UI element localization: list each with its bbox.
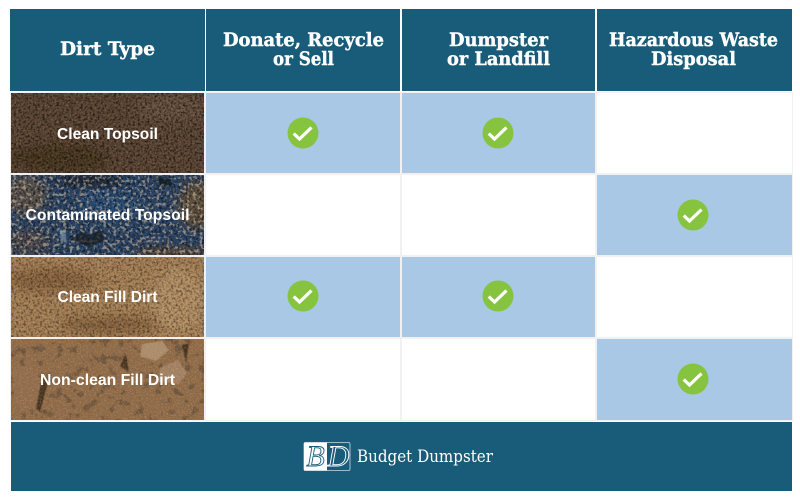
row 4: Dumpster cell empty: [402, 339, 595, 420]
row 4: Hazardous cell with check: [597, 339, 792, 420]
row 2: Dumpster cell empty: [402, 175, 595, 255]
row 4: Non-clean Fill Dirt image and label: Non-clean Fill Dirt: [40, 372, 175, 389]
logo: wordmark: Budget Dumpster: [357, 447, 493, 466]
row 3: Dumpster cell with check: [402, 257, 595, 337]
header: Dumpster or Landfill: or Landfill: [447, 49, 550, 70]
logo: BD mark: D: [327, 440, 350, 473]
row 1: Clean Topsoil image and label: Clean Topsoil: [57, 126, 158, 143]
row 1: Hazardous cell empty: [597, 93, 792, 173]
header: Dirt Type: Dirt Type: [60, 39, 155, 60]
row 4: Donate cell empty: [206, 339, 400, 420]
header: Dumpster or Landfill: Dumpster: [449, 30, 548, 51]
footer banner: [11, 422, 792, 491]
logo: BD mark: [304, 440, 350, 473]
header: Donate, Recycle or Sell: [206, 9, 400, 91]
row 1: Donate cell with check: [206, 93, 400, 173]
header: Hazardous Waste Disposal: Hazardous Waste: [609, 30, 778, 51]
row 4: Non-clean Fill Dirt image and label: [11, 339, 204, 420]
row 3: Clean Fill Dirt image and label: [5, 257, 204, 337]
row 3: Donate cell with check: [206, 257, 400, 337]
row 2: Hazardous cell with check: [597, 175, 792, 255]
row 3: Clean Fill Dirt image and label: Clean Fill Dirt: [58, 289, 158, 306]
header: Dumpster or Landfill: [402, 9, 595, 91]
row 2: Contaminated Topsoil image and label: Contaminated Topsoil: [26, 207, 189, 224]
header: Dirt Type: [10, 9, 205, 91]
table grid background: [10, 92, 793, 421]
row 3: Hazardous cell empty: [597, 257, 792, 337]
row 2: Contaminated Topsoil image and label: [11, 175, 204, 255]
row 1: Clean Topsoil image and label: [10, 93, 205, 173]
header: Hazardous Waste Disposal: Disposal: [651, 49, 736, 70]
header: Donate, Recycle or Sell: or Sell: [273, 49, 334, 70]
logo: BD mark: B: [306, 440, 325, 473]
row 1: Dumpster cell with check: [402, 93, 595, 173]
header: Hazardous Waste Disposal: [597, 9, 792, 91]
row 2: Donate cell empty: [206, 175, 400, 255]
header: Donate, Recycle or Sell: Donate, Recycle: [223, 30, 384, 51]
